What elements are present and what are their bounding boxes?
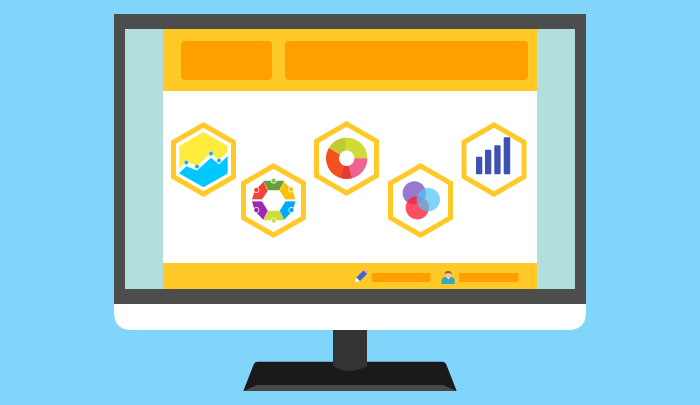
red circle: [406, 196, 429, 219]
content area: [163, 91, 537, 263]
segment dots: [254, 178, 294, 223]
blue circle: [417, 188, 440, 211]
icon: pencil: [355, 269, 368, 282]
red segment: [252, 182, 268, 199]
stand base: [243, 362, 457, 391]
footer band: [163, 263, 537, 289]
footer bar left: [372, 273, 430, 282]
left sidebar: [125, 29, 163, 289]
hexagon: overlapping circles: [390, 166, 450, 235]
data points: [184, 151, 221, 169]
header block right: [285, 41, 528, 80]
header band: [163, 29, 537, 91]
monitor chin: [114, 300, 586, 330]
bars: [476, 137, 510, 174]
hexagon: bar chart: [464, 125, 524, 194]
icon: person: [442, 271, 455, 284]
lime slice: [346, 138, 367, 158]
red slice: [340, 166, 352, 179]
header block left: [181, 41, 272, 80]
stand base front edge: [244, 385, 456, 391]
stand neck: [333, 328, 367, 371]
lime segment: [263, 211, 284, 220]
blue segment: [280, 201, 295, 220]
hexagon: process ring: [244, 166, 304, 235]
footer bar right: [459, 273, 518, 282]
hexagon: donut chart: [316, 124, 376, 193]
purple circle: [403, 181, 426, 205]
right sidebar: [537, 29, 575, 289]
olive segment: [263, 181, 284, 190]
hexagon: area chart: [174, 125, 234, 194]
yellow segment: [280, 182, 295, 199]
screen: [125, 29, 575, 289]
pink slice: [349, 158, 367, 178]
yellow area: [179, 132, 228, 168]
monitor bezel: [114, 14, 586, 304]
olive slice: [329, 138, 346, 154]
purple segment: [252, 201, 268, 220]
monitor stand: [243, 328, 457, 391]
blue area: [179, 156, 228, 187]
orange slice: [326, 148, 344, 178]
